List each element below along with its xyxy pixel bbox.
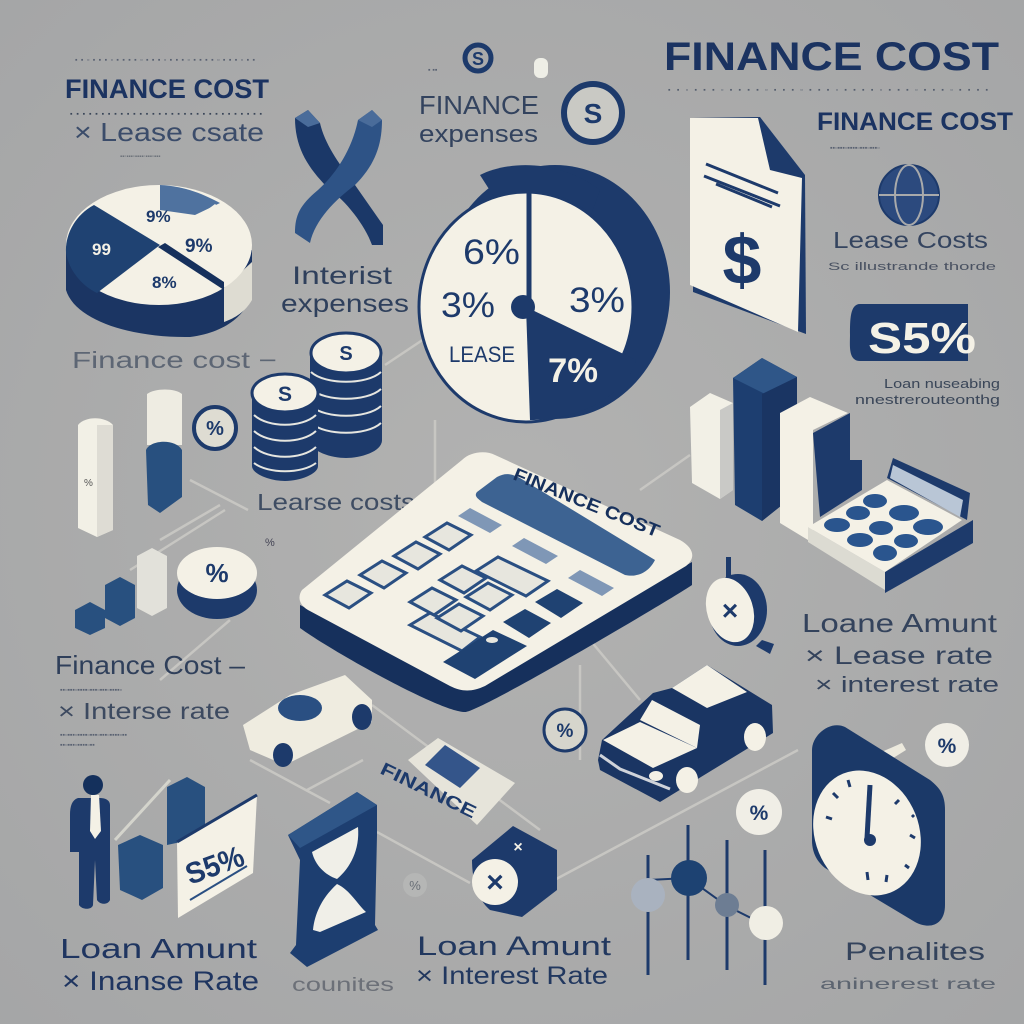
hourglass (288, 792, 378, 967)
small bars left (78, 390, 182, 537)
person with chart (70, 775, 257, 918)
percent disc (177, 547, 257, 619)
label loan amount: Loane Amunt (802, 608, 998, 638)
label loan amount left: × Inanse Rate (62, 966, 259, 996)
stopwatch: × (722, 595, 738, 626)
small bars lower left (75, 548, 167, 635)
3d bars right (690, 358, 862, 540)
small bars left: % (84, 478, 93, 489)
dice icon: × (486, 866, 504, 899)
percent badge (850, 304, 976, 363)
finance card: FINANCE (377, 759, 479, 822)
person with chart: S5% (181, 840, 249, 892)
main calculator (300, 452, 692, 712)
small emblem: % (409, 878, 421, 893)
heading: lease rate: × Lease csate (74, 117, 264, 147)
main pie chart (419, 165, 670, 422)
percent bubble: % (750, 802, 769, 825)
pie chart left: 99 (92, 240, 111, 259)
label interest rate: aninerest rate (820, 976, 996, 993)
main pie chart: 7% (548, 352, 598, 390)
car right (598, 665, 773, 802)
percent bubble (736, 789, 782, 835)
coins stack (252, 333, 382, 481)
icon: dollar circle: S (584, 98, 602, 129)
document with dollar: $ (723, 221, 761, 299)
node chart (631, 825, 783, 985)
label loan amount: × interest rate (815, 672, 999, 697)
label interest expenses: Interist (292, 262, 392, 290)
top icon with caption: ▪ ▪▪ (428, 67, 438, 74)
caption: Sc illustrande thorde (828, 261, 996, 273)
coins stack: S (339, 343, 353, 365)
label loan amount (802, 608, 999, 697)
label loan amount center: × Interest Rate (416, 962, 608, 990)
label finance cost left: Finance cost − (72, 347, 277, 373)
icon: globe (879, 165, 939, 225)
label counties: counites (292, 975, 394, 996)
main title: FINANCE COST (664, 35, 999, 79)
percent circle: % (206, 418, 224, 440)
top icon with caption (428, 45, 548, 78)
title caption: ▪▪▫▪▪▪▫▪▪▪▪▫▪▪▪▫▪▪▪▫▪▪▪▪▫▪▪▪▫▪▪▪▫▪▪▪▪ (668, 87, 989, 94)
dice icon (472, 826, 557, 917)
percent disc: % (205, 558, 229, 588)
label loan amount: × Lease rate (805, 642, 993, 670)
caption under heading: ▪▪▪▪▪▪▪▪▪▪▪▪▪▪▪▪▪▪▪▪▪▪▪▪▪▪▪▪▪▪▪ (70, 111, 263, 118)
percent badge: S5% (868, 314, 976, 363)
caption: ▪▪▫▪▪▪▫▪▪▪▪▫▪▪ (60, 742, 95, 749)
label loan: nnestrerouteonthg (855, 392, 1000, 407)
coins stack: S (278, 383, 292, 406)
label loan amount center: Loan Amunt (417, 931, 612, 961)
icon: ribbon X (295, 110, 383, 245)
small emblem (403, 873, 427, 897)
stopwatch (698, 557, 774, 654)
small caption: ▪▪▫▪▪▪▫▪▪▪▪▫▪▪▪▫▪▪▪ (120, 154, 160, 160)
calculator right (808, 458, 973, 593)
label interest expenses: expenses (281, 290, 409, 318)
percent bubble (925, 723, 969, 767)
label loan amount center (416, 931, 612, 990)
document with dollar (690, 117, 806, 334)
main pie chart: 3% (569, 281, 625, 320)
heading right finance cost: FINANCE COST (817, 108, 1013, 136)
percent bubble: % (938, 735, 957, 758)
label loan amount left (60, 933, 259, 996)
label loan amount left: Loan Amunt (60, 933, 257, 964)
main pie chart: 6% (463, 233, 520, 272)
label finance cost minus: Finance Cost – (55, 650, 246, 680)
pie chart left (66, 185, 252, 337)
label finance expenses: FINANCE (419, 90, 539, 120)
icon: dollar circle (564, 84, 622, 142)
label lease costs: Lease Costs (833, 227, 988, 253)
pie chart left: 9% (185, 236, 213, 257)
percent circle (194, 407, 236, 449)
top left caption: ▪▪▫▪▪▪▫▪▪▪▪▫▪▪▪▫▪▪▪▫▪▪▪▪▫▪▪▪▫▪▪ (75, 57, 256, 64)
car left (243, 675, 372, 767)
clock (795, 725, 945, 926)
pie chart left: 9% (146, 207, 171, 226)
main pie chart: 3% (441, 286, 495, 325)
label loan: Loan nuseabing (884, 376, 1000, 391)
small percent text: % (265, 537, 275, 549)
label loan (855, 376, 1000, 407)
label finance expenses: expenses (419, 121, 538, 148)
caption: ▪▪▫▪▪▪▫▪▪▪▪▫▪▪▪▫▪▪▪▫▪▪▪▪▫▪▪ (60, 732, 128, 739)
dice icon: × (513, 839, 523, 856)
caption (60, 687, 128, 749)
top icon with caption: S (472, 49, 484, 69)
label lease costs center: Learse costs (257, 489, 415, 515)
main calculator: FINANCE COST (511, 464, 663, 541)
label penalties: Penalites (845, 938, 985, 966)
label interest expenses (281, 262, 409, 318)
percent small circle (544, 709, 586, 751)
finance card (377, 738, 515, 825)
label finance expenses (419, 90, 539, 148)
pie chart left: 8% (152, 273, 177, 292)
label interest rate: × Interse rate (58, 698, 230, 724)
main pie chart: LEASE (449, 342, 515, 367)
heading: finance cost top left: FINANCE COST (65, 74, 270, 104)
percent small circle: % (557, 721, 574, 742)
caption: ▪▪▫▪▪▪▫▪▪▪▪▫▪▪▪▫▪▪▪▫ (830, 145, 880, 152)
caption: ▪▪▫▪▪▪▫▪▪▪▪▫▪▪▪▫▪▪▪▫▪▪▪▪▫ (60, 687, 122, 694)
